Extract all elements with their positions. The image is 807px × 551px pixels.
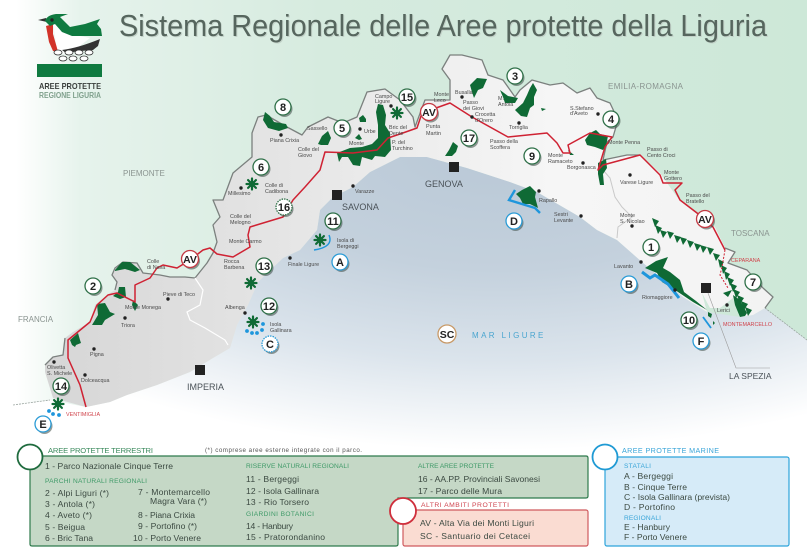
green box [30,456,588,546]
map labels: Colle del [230,214,251,220]
marker 7 [745,274,762,292]
marker 12: 12 [263,301,275,313]
map labels: Isola di [337,238,354,244]
marine area A [314,235,330,250]
icon: bird [38,14,102,61]
legend panel: marine protected areas: F - Porto Venere [624,532,687,542]
map labels: Sestri [554,212,568,218]
regional parks: 9 - Portofino (*) [138,521,197,531]
map labels: MAR LIGURE [472,331,546,340]
marker SC: SC [440,329,455,341]
map labels: Busalla [455,90,473,96]
national park: 1 - Parco Nazionale Cinque Terre [45,461,173,471]
map labels: Pigna [90,352,104,358]
red circle [390,498,416,524]
map labels: Monte [548,153,563,159]
map labels: Sassello [307,126,327,132]
park 8 Piana Crixia [263,112,288,131]
regional parks: 6 - Bric Tana [45,533,93,543]
map labels: Millesimo [228,191,250,197]
other protected areas: ALTRE AREE PROTETTE [418,463,495,470]
logo text: AREE PROTETTE [39,81,101,91]
map labels: Riomaggiore [642,295,673,301]
map labels: Gottero [664,176,682,182]
marine area B [642,272,679,298]
park 17 Parco delle Mura [445,142,458,156]
map labels: TOSCANA [731,229,770,238]
other protected areas: 17 - Parco delle Mura [418,486,502,496]
marine dots C and E [47,322,265,417]
map labels: Lerici [717,308,730,314]
map labels: d'Orero [475,118,493,124]
marker 16 [276,199,294,217]
map labels: Dente [389,131,403,137]
marker 3: 3 [512,71,518,83]
map labels: Giovo [298,153,312,159]
marker 5 [334,120,352,138]
marine protected areas [314,190,711,328]
legend panel: marine protected areas: B - Cinque Terre [624,482,687,492]
map labels: Turchino [392,146,413,152]
line to La Spezia [708,293,770,368]
marker 1 [643,239,660,257]
marker AV west [182,250,200,270]
map labels: Monte [664,170,679,176]
map labels: Lavanto [614,264,633,270]
legend panel: other protected scopes: SC - Santuario dei Cetacei [420,531,530,541]
legend panel: other protected scopes [390,498,588,546]
park 2 Alpi Liguri [70,262,140,347]
reserves and botanical gardens [246,463,349,542]
marker 9 [524,148,542,166]
map labels: FRANCIA [18,315,54,324]
marker B [621,276,638,294]
legend panel: marine protected areas [592,444,789,546]
note: (*) comprese aree esterne integrate con il parco. [205,447,362,454]
heading: ALTRI AMBITI PROTETTI [421,502,509,509]
northern border line [45,55,773,365]
land [45,55,773,407]
marine area F [703,317,711,328]
map labels: Piana Crixia [270,138,299,144]
map labels: Albenga [225,305,245,311]
map labels: Torriglia [509,125,528,131]
marker C [262,336,280,354]
red line: Alta Via dei Monti Liguri [68,103,725,407]
marker AV centre [420,104,439,122]
map labels: Finale Ligure [288,262,319,268]
marker 12 [261,298,278,316]
regional parks: Magra Vara (*) [150,496,207,506]
map labels: SAVONA [342,202,379,212]
map labels: Ramaceto [548,159,573,165]
map labels: Borgonasca [567,165,596,171]
marker E [35,416,52,434]
map labels: Monte [434,92,449,98]
logo: Aree Protette Regione Liguria [37,14,102,100]
marker 15: 15 [401,92,413,104]
stars: small reserves and gardens [52,108,402,410]
protected land parks [70,78,752,347]
marker F [693,333,710,351]
map labels: S. Nicolao [620,219,645,225]
other protected areas: 16 - AA.PP. Provinciali Savonesi [418,474,540,484]
regional parks: 2 - Alpi Liguri (*) [45,488,109,498]
regional parks [45,478,210,543]
green circle [18,444,42,470]
map of Liguria [45,55,773,417]
legend panel: other protected scopes: AV - Alta Via dei Monti Liguri [420,518,534,528]
regional parks: 3 - Antola (*) [45,499,95,509]
reserves and botanical gardens: 11 - Bergeggi [246,474,299,484]
map labels: Passo della [490,139,518,145]
marker 2: 2 [90,281,96,293]
map labels: di Nava [147,265,165,271]
marker 2 [85,278,102,296]
provincial borders [187,278,228,345]
map labels: Scoffera [490,145,510,151]
park 5 small patches [355,115,366,140]
park 9 Portofino [516,186,538,208]
park 10 Porto Venere [708,312,715,325]
marker 14: 14 [55,381,68,393]
map labels: Campo [375,94,392,100]
marker 6 [253,159,270,177]
park 7 Montemarcello [723,290,747,317]
map labels: Olivetta [47,365,65,371]
marker 1: 1 [648,242,654,254]
map labels [18,82,772,418]
map labels: Bergeggi [337,244,359,250]
marker 8: 8 [280,102,286,114]
map labels: Cento Croci [647,153,675,159]
other protected areas [418,463,540,496]
marker SC [438,325,456,343]
marker A [332,254,350,272]
map labels: dei Giovi [463,106,484,112]
park 5 Beigua [318,104,391,166]
France and Tuscany dashed boundaries [13,308,807,405]
map labels: d'Aveto [570,111,588,117]
map labels: LA SPEZIA [729,371,772,381]
numbered markers [35,68,762,434]
blue box [605,457,789,546]
map labels: Leco [434,98,446,104]
map labels: Passo di [647,147,668,153]
place dots [52,95,729,377]
marker 3 [507,68,524,86]
reserves and botanical gardens: 15 - Pratorondanino [246,532,325,542]
blue circle [592,444,618,470]
marker 13: 13 [258,261,270,273]
regional parks: 4 - Aveto (*) [45,510,92,520]
marker 6: 6 [258,162,264,174]
map labels: Crocetta [475,112,495,118]
marker 16: 16 [278,202,290,214]
park 4 Aveto [568,130,608,185]
reserves and botanical gardens: RISERVE NATURALI REGIONALI [246,463,349,470]
reserves and botanical gardens: 13 - Rio Torsero [246,497,309,507]
map labels: Monte [349,141,364,147]
marker 7: 7 [750,277,756,289]
marine area D [509,190,540,213]
logo green bar [37,64,102,77]
marker AV centre: AV [422,107,436,119]
marker 11: 11 [327,216,339,228]
legend panel: marine protected areas: C - Isola Gallinara (prevista) [624,492,730,502]
map labels: VENTIMIGLIA [66,412,101,418]
heading: AREE PROTETTE MARINE [622,446,719,455]
park 1 Cinque Terre [645,257,707,310]
marker AV east [696,210,715,230]
title: Sistema Regionale delle Aree protette della Liguria [120,9,769,44]
regional parks: 7 - Montemarcello [138,487,210,497]
map labels: Colle [147,259,159,265]
map labels: Rocca [224,259,239,265]
map labels: Martin [426,131,441,137]
map labels: Ligure [375,99,390,105]
regional parks: 10 - Porto Venere [133,533,201,543]
map labels: S.Stefano [570,106,594,112]
map labels: Barbena [224,265,244,271]
eggs [54,50,93,61]
marker 13 [256,258,274,276]
marker B: B [625,279,633,291]
map labels: IMPERIA [187,382,224,392]
map labels: EMILIA-ROMAGNA [608,82,684,91]
marker 4 [603,111,620,129]
heading: AREE PROTETTE TERRESTRI [48,446,153,455]
marker 10 [681,312,698,330]
map labels: Bric del [389,125,407,131]
map labels: Monte Carmo [229,239,262,245]
map labels: Pieve di Teco [163,292,195,298]
map labels: Dolceacqua [81,378,109,384]
map labels: Colle di [265,183,283,189]
map labels: Cadibona [265,189,288,195]
map labels: S. Michele [47,371,72,377]
map labels: Monte [620,213,635,219]
regional parks: PARCHI NATURALI REGIONALI [45,478,147,485]
marker 5: 5 [339,123,345,135]
marker 9: 9 [529,151,535,163]
marker 17: 17 [463,133,475,145]
marker 4: 4 [608,114,615,126]
marker AV west: AV [183,254,197,266]
map labels: Colle del [298,147,319,153]
map labels: Rapallo [539,198,557,204]
marker 11 [325,213,342,231]
marker D [506,213,524,231]
reserves and botanical gardens: GIARDINI BOTANICI [246,511,314,518]
map labels: Gallinara [270,328,292,334]
map labels: Bratello [686,199,704,205]
map labels: Triora [121,323,135,329]
map labels: Varese Ligure [620,180,653,186]
marker 10: 10 [683,315,695,327]
map labels: Punta [426,124,440,130]
red box [403,510,588,546]
sea: Mar Ligure [0,157,807,551]
marker 15 [399,89,416,107]
map labels: P. del [392,140,405,146]
map labels: PIEMONTE [123,169,165,178]
map labels: Melogno [230,220,251,226]
city squares [195,162,711,375]
marker C: C [266,339,274,351]
regional parks: 5 - Beigua [45,522,85,532]
title: Sistema Regionale delle Aree protette della Liguria [119,8,768,43]
legend panel: marine protected areas: STATALI [624,463,651,470]
regional parks: 8 - Piana Crixia [138,510,195,520]
map labels: Monte Penna [608,140,640,146]
logo: Aree Protette Regione Liguria: REGIONE LIGURIA [39,91,101,100]
legend panel: terrestrial protected areas [18,444,588,546]
marker 14 [53,378,70,396]
reserves and botanical gardens: 12 - Isola Gallinara [246,486,319,496]
legend panel: marine protected areas: D - Portofino [624,502,675,512]
marker AV east: AV [698,214,712,226]
marker A: A [336,257,344,269]
map labels: MONTEMARCELLO [723,322,772,328]
map labels: Isola [270,322,281,328]
marker 8 [275,99,292,117]
map labels: Monte Monega [125,305,161,311]
marker 17 [461,130,478,148]
marker F: F [698,336,705,348]
map labels: Levante [554,218,573,224]
map labels: Antola [498,102,513,108]
map labels: GENOVA [425,179,463,189]
map labels: Varazze [355,189,374,195]
park 3 Antola [470,78,546,117]
legend panel: marine protected areas: E - Hanbury [624,522,671,532]
map labels: Urbe [364,129,376,135]
map labels: CEPARANA [731,258,761,264]
dashed red line to Montemarcello [720,250,728,288]
legend panel: marine protected areas: REGIONALI [624,515,661,522]
marker D: D [510,216,518,228]
legend panel: marine protected areas: A - Bergeggi [624,471,673,481]
map labels: Passo del [686,193,710,199]
reserves and botanical gardens: 14 - Hanbury [246,521,294,531]
map labels: M. [498,96,504,102]
park 7 Magra Vara triangles [652,218,752,316]
map labels: Passo [463,100,478,106]
marker E: E [39,419,47,431]
